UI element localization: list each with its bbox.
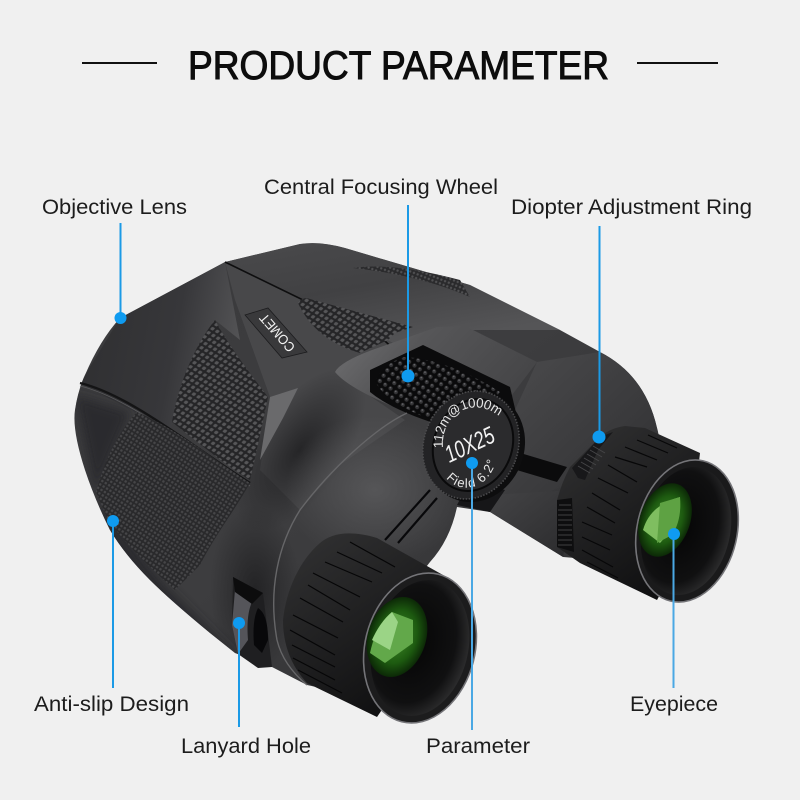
lanyard hole [232, 577, 272, 668]
black bands under dial [385, 490, 437, 543]
grip: anti-slip lower [96, 412, 250, 590]
left eyecup and lens [348, 561, 492, 735]
label: Diopter Adjustment Ring: Diopter Adjustment Ring [511, 196, 752, 219]
focus dial: Field 6.2° [446, 460, 494, 488]
label: Eyepiece: Eyepiece [630, 693, 718, 716]
label: Diopter Adjustment Ring [511, 196, 752, 444]
label: Central Focusing Wheel: Central Focusing Wheel [264, 176, 498, 199]
left eyepiece [283, 533, 492, 735]
label: Anti-slip Design [34, 515, 189, 716]
label: Central Focusing Wheel [264, 176, 498, 382]
label: Lanyard Hole: Lanyard Hole [181, 735, 311, 758]
label: Parameter [426, 457, 530, 758]
grip: near focus wheel [298, 298, 413, 353]
grip: anti-slip upper [172, 320, 268, 480]
right eyecup and lens [622, 450, 752, 612]
label: Anti-slip Design: Anti-slip Design [34, 693, 189, 716]
focus wheel bezel [335, 326, 537, 418]
label: Lanyard Hole [181, 617, 311, 758]
focus wheel window [370, 345, 520, 430]
body silhouette [74, 243, 660, 690]
brand plate: COMET [257, 310, 298, 355]
grip: top strip [353, 266, 470, 297]
focus wheel [375, 357, 500, 430]
brand plate [245, 308, 307, 358]
label: Objective Lens [42, 196, 187, 324]
front rim line [274, 413, 407, 685]
body shading [75, 243, 660, 675]
focus dial [422, 390, 525, 502]
title: PRODUCT PARAMETER [188, 44, 609, 88]
focus dial: 10X25 [441, 422, 500, 468]
top plate seam [225, 262, 397, 358]
label: Eyepiece [630, 528, 718, 716]
binoculars product illustration [74, 243, 740, 724]
label: Objective Lens: Objective Lens [42, 196, 187, 219]
side seam [80, 383, 250, 483]
label: Parameter: Parameter [426, 735, 530, 758]
focus dial: 112m@1000m [434, 398, 502, 447]
right eyepiece [557, 426, 752, 612]
